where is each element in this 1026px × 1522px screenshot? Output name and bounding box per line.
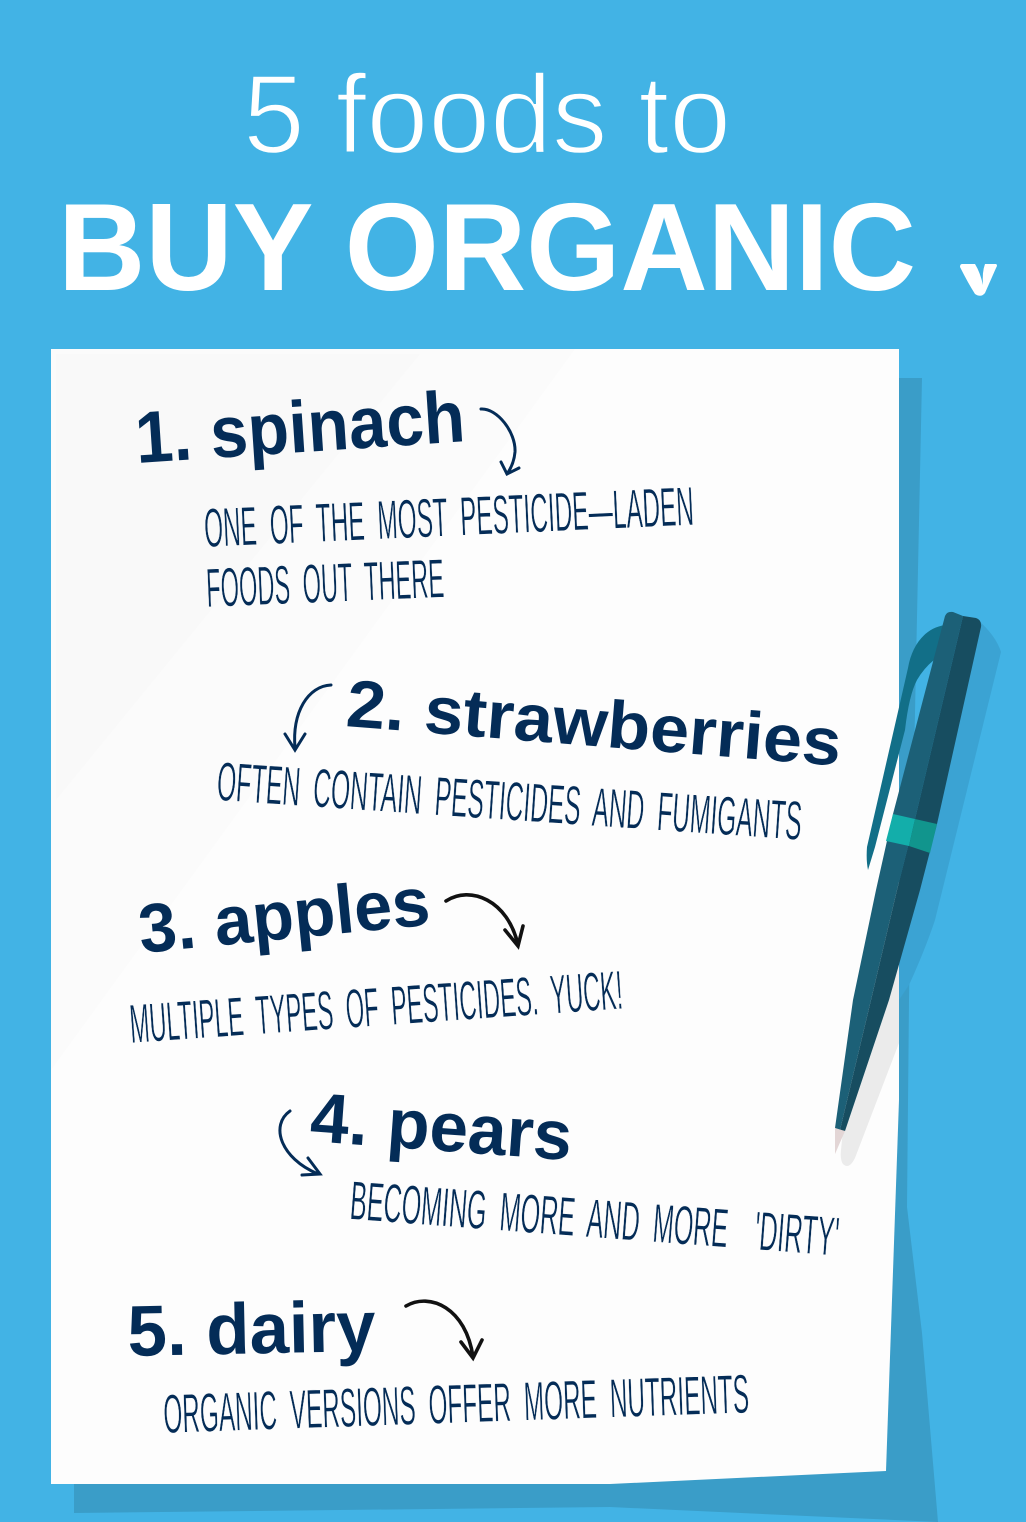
text: spinach note bbox=[203, 475, 695, 619]
pen barrel dark bbox=[840, 616, 981, 1131]
item 1: spinach bbox=[133, 376, 695, 619]
item 4: pears bbox=[280, 1078, 841, 1268]
panel: paper sheet bbox=[51, 349, 899, 1484]
icon: brand logo bbox=[960, 264, 997, 296]
arrow: spinach bbox=[481, 409, 519, 474]
heading: 1. spinach: 1. spinach bbox=[133, 376, 467, 479]
arrow: strawberries bbox=[285, 685, 331, 750]
heading: 4. pears: 4. pears bbox=[308, 1078, 575, 1175]
pen shadow bbox=[841, 620, 1001, 1166]
pen band bbox=[886, 814, 915, 846]
item 3: apples bbox=[128, 863, 625, 1055]
title: BUY ORGANIC: BUY ORGANIC bbox=[58, 179, 916, 317]
paper shadow bbox=[74, 378, 938, 1522]
arrow: pears bbox=[280, 1111, 320, 1175]
pen clip bbox=[867, 625, 945, 870]
pen barrel light bbox=[835, 612, 963, 1130]
item 2: strawberries bbox=[215, 666, 844, 852]
title: 5 foods to: 5 foods to bbox=[243, 52, 731, 177]
pen tip bbox=[835, 1128, 845, 1154]
icon: pen bbox=[835, 612, 981, 1154]
text: spinach note: FOODS OUT THERE bbox=[205, 547, 445, 619]
arrow: apples bbox=[446, 895, 523, 946]
heading: 2. strawberries: 2. strawberries bbox=[344, 666, 844, 781]
item 5: dairy bbox=[127, 1287, 750, 1445]
heading: 5. dairy: 5. dairy bbox=[127, 1287, 376, 1372]
arrow: dairy bbox=[406, 1301, 482, 1358]
heading: 3. apples: 3. apples bbox=[135, 863, 433, 968]
